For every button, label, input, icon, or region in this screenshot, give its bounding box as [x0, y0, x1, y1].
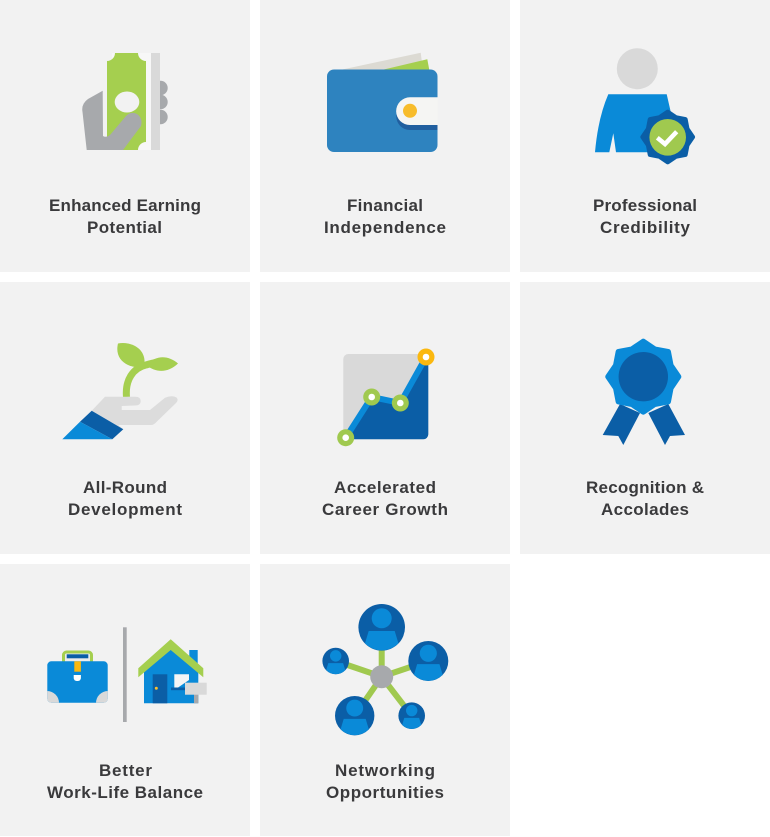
heading — [322, 478, 448, 519]
panel: Professional Credibility — [520, 0, 770, 272]
icon: award rosette — [603, 342, 685, 445]
heading: Enhanced Earning — [49, 196, 201, 215]
heading: Accolades — [601, 500, 689, 519]
heading — [324, 196, 446, 237]
heading: Credibility — [600, 218, 691, 237]
heading: Professional — [593, 196, 697, 215]
panel: Accelerated Career Growth — [260, 282, 510, 554]
heading: Opportunities — [326, 783, 444, 802]
heading — [586, 478, 704, 519]
heading: All-Round — [83, 478, 167, 497]
heading — [68, 478, 182, 519]
heading: Independence — [324, 218, 446, 237]
heading — [47, 761, 203, 802]
panel: Networking Opportunities — [260, 564, 510, 836]
heading: Better — [99, 761, 152, 780]
heading: Networking — [335, 761, 435, 780]
icon: briefcase — [47, 652, 108, 703]
heading: Accelerated — [334, 478, 436, 497]
heading: Financial — [347, 196, 423, 215]
panel: Financial Independence — [260, 0, 510, 272]
icon: hand with sprout — [62, 343, 178, 439]
heading — [593, 196, 697, 237]
icon: house — [138, 639, 207, 703]
panel: Recognition & Accolades — [520, 282, 770, 554]
heading: Career Growth — [322, 500, 448, 519]
icon: wallet — [327, 53, 438, 152]
heading: Development — [68, 500, 182, 519]
heading: Potential — [87, 218, 162, 237]
heading: Work-Life Balance — [47, 783, 203, 802]
heading — [326, 761, 444, 802]
heading: Recognition & — [586, 478, 704, 497]
icon: growth chart — [337, 348, 434, 446]
icon: person with badge — [595, 48, 693, 162]
icon: people network — [322, 604, 448, 735]
divider between work and life — [123, 627, 127, 722]
panel: Better Work-Life Balance — [0, 564, 250, 836]
panel: All-Round Development — [0, 282, 250, 554]
heading — [49, 196, 201, 237]
panel: Enhanced Earning Potential — [0, 0, 250, 272]
icon: hand holding money — [82, 53, 168, 150]
